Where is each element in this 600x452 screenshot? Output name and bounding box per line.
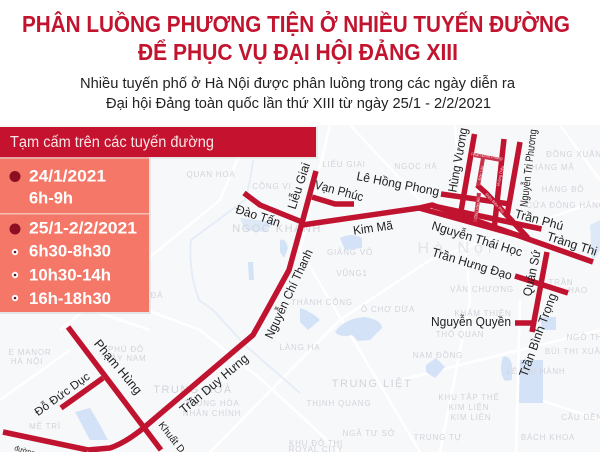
street labels: Đào Tấn	[234, 202, 282, 230]
street labels: Trần Hưng Đạo	[430, 245, 514, 283]
place names: THỔ QUAN	[436, 330, 484, 339]
street labels: Kim Mã	[352, 218, 394, 238]
road: Lê Hồng Phong	[441, 194, 510, 204]
title	[22, 9, 570, 65]
street labels: Tràng Thi	[545, 229, 599, 259]
place names	[9, 149, 600, 452]
place names: TRUNG TỰ	[414, 433, 462, 442]
street labels: Liễu Giai	[284, 161, 313, 211]
street labels: Hùng Vương	[445, 127, 471, 193]
street labels: Nguyễn Thái Học	[430, 218, 524, 259]
street labels: Điện Biên Phủ	[484, 192, 506, 214]
road: Chu Văn An	[475, 193, 479, 222]
road: Nguyễn Tri Phương	[507, 142, 520, 216]
road: parallel	[419, 208, 528, 238]
street labels: Vạn Phúc	[313, 178, 365, 204]
date block: 24/1/2021: 6h-9h	[29, 188, 73, 208]
date block: 25/1-2/2/2021: 25/1-2/2/2021	[29, 218, 137, 238]
road: Quán Sứ, Trần Bình Trọng	[532, 252, 547, 332]
place names: NGÃ TƯ SỞ	[343, 429, 395, 438]
panel shadow and body	[0, 157, 151, 314]
place names: THÀNH CÔNG	[291, 298, 353, 307]
place names: NGỌC KHÁNH	[232, 222, 322, 235]
place names: Ô CHỢ DỪA	[361, 305, 415, 314]
road: Hùng Vương	[460, 134, 474, 217]
road: Trần Phú	[433, 206, 542, 229]
street labels: Quán Sứ	[520, 249, 544, 297]
subtitle: Nhiều tuyến phố ở Hà Nội được phân luồng trong các ngày diễn ra	[80, 75, 516, 92]
street labels: Nguyễn Quyền	[431, 314, 511, 329]
place names: LÁNG HẠ	[280, 343, 320, 352]
road: Độc Lập	[478, 158, 483, 186]
street labels: Nguyễn Chí Thanh	[261, 247, 316, 341]
date block: 25/1-2/2/2021	[10, 218, 137, 308]
street labels: Đỗ Đức Dục	[32, 370, 93, 419]
panel header	[0, 127, 318, 159]
place names: TRẦN	[549, 277, 573, 287]
street labels: Lê Hồng Phong	[355, 169, 441, 199]
road: bottom left	[3, 432, 88, 450]
place names: NHÂN CHÍNH	[183, 409, 241, 418]
subtitle: Đại hội Đảng toàn quốc lần thứ XIII từ ngày 25/1 - 2/2/2021	[106, 95, 491, 112]
place names: LIỄU GIAI	[322, 160, 366, 169]
place names: KHU ĐÔ THỊ	[289, 439, 343, 448]
road: Phan Đình Phùng	[474, 155, 501, 160]
street labels: Hoàng Diệu	[495, 165, 505, 187]
place names: Hà Nội	[418, 240, 496, 257]
place names: TRUNG HOÀ	[153, 383, 233, 396]
street labels: Nguyễn Tri Phương	[517, 129, 540, 208]
place names: ĐÀ	[151, 291, 163, 300]
place names: PHÚ ĐÔ	[108, 345, 144, 354]
street labels: Phạm Hùng	[91, 337, 145, 397]
road: Nguyễn Chí Thanh, Trần Duy Hưng	[88, 171, 316, 450]
road: Điện Biên Phủ	[477, 185, 528, 238]
street labels: Chu Văn An	[473, 197, 481, 219]
place names: TRUNG LIỆT	[332, 377, 412, 390]
place names: KHÂM THIÊN	[454, 309, 512, 318]
street labels: Trần Phú	[513, 207, 565, 233]
place names: MỄ TRÌ	[29, 422, 61, 431]
place names: TÂY NAM	[105, 354, 147, 363]
street labels: Độc Lập	[477, 164, 485, 181]
street labels: Phan Đình Phùng	[471, 151, 503, 161]
road: Kim Mã, Nguyễn Thái Học	[302, 205, 593, 262]
place names: VŨNG1	[336, 269, 368, 278]
place names: HÀNG MÃ	[532, 163, 574, 172]
place names: NGỌC HÀ	[395, 162, 437, 171]
place names: QUAN HOA	[186, 170, 236, 179]
place names: HÀ NỘI	[11, 357, 43, 366]
panel header: Tạm cấm trên các tuyến đường	[10, 134, 214, 151]
road: Trần Hưng Đạo	[515, 276, 568, 293]
subtitle	[80, 75, 516, 112]
place names: LÊ ĐẠI HÀNH	[506, 367, 566, 376]
date block: 24/1/2021	[10, 166, 106, 208]
date block: 25/1-2/2/2021: 10h30-14h	[29, 266, 111, 284]
place names: THỊNH QUANG	[307, 399, 371, 408]
place names: KIM LIÊN	[449, 403, 489, 412]
title: ĐỂ PHỤC VỤ ĐẠI HỘI ĐẢNG XIII	[138, 37, 458, 65]
place names: NAM ĐỒNG	[413, 350, 463, 360]
road: Nguyễn Quyền	[515, 320, 533, 326]
road: Đào Tấn	[244, 193, 302, 222]
place names: BÁCH KHOA	[521, 433, 575, 442]
lakes	[75, 218, 600, 440]
date block: 25/1-2/2/2021: 6h30-8h30	[29, 242, 111, 260]
road: Phạm Hùng	[68, 327, 161, 450]
place names: HAO	[568, 286, 588, 295]
place names: VĂN CHƯƠNG	[450, 285, 514, 294]
place names: GIẢNG VÕ	[327, 248, 373, 257]
road: Đỗ Đức Dục	[61, 378, 103, 408]
panel: restriction schedule	[0, 127, 318, 314]
date block: 24/1/2021: 24/1/2021	[29, 166, 106, 186]
place names: CÔNG VỊ	[252, 182, 292, 191]
street labels: Trần Duy Hưng	[177, 351, 251, 417]
place names: KIM LIÊN	[451, 413, 491, 422]
date block: 25/1-2/2/2021: 16h-18h30	[29, 289, 111, 308]
street labels: Trần Bình Trọng	[516, 291, 560, 379]
road: Hoàng Diệu	[494, 139, 504, 230]
place names: HÀNG BÔ	[542, 185, 584, 194]
road: Vạn Phúc	[312, 197, 354, 204]
map background	[0, 125, 600, 452]
road network	[3, 134, 593, 450]
place names: E MANOR	[9, 348, 51, 357]
place names: TRUNG HÒA	[184, 399, 240, 408]
street labels	[13, 127, 599, 452]
place names: KHU TẬP THỂ	[438, 393, 500, 402]
